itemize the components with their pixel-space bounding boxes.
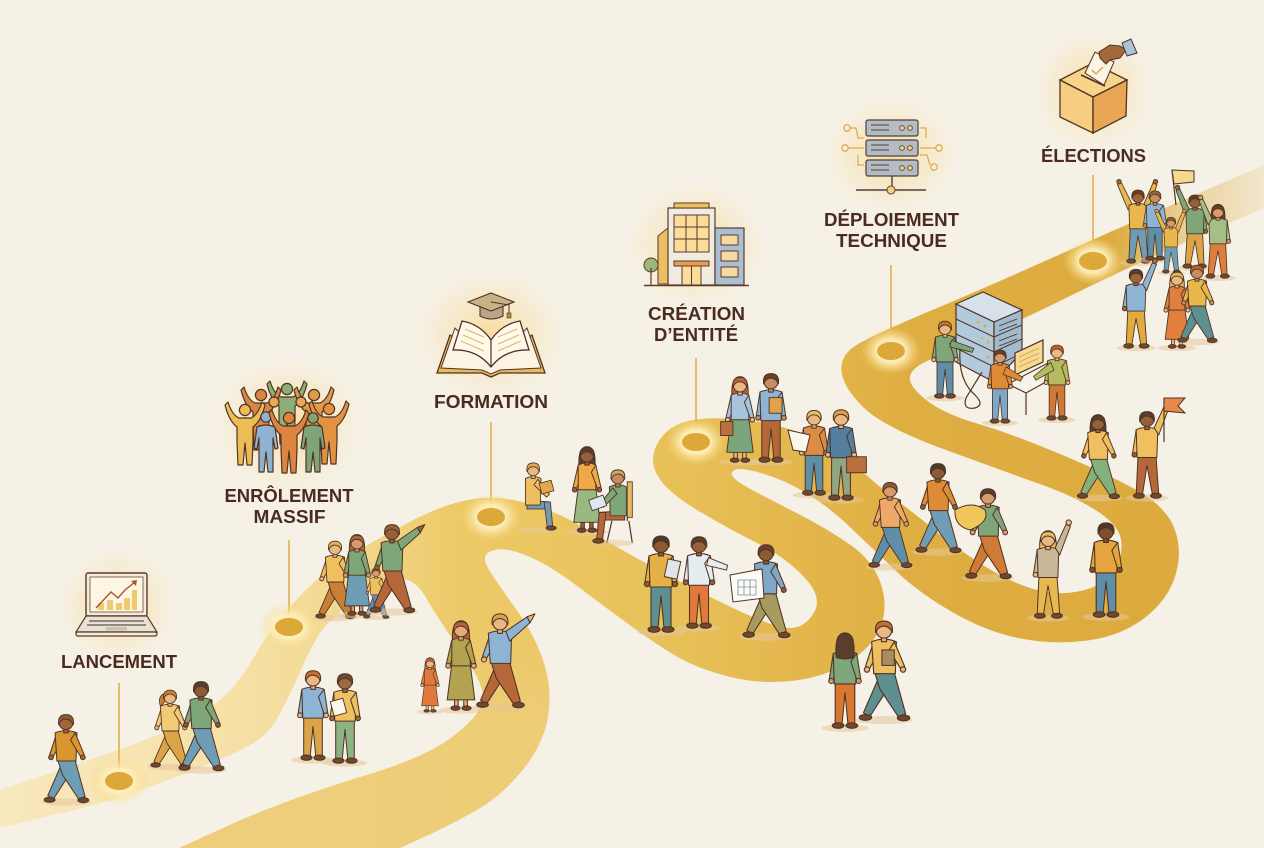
seated man with laptop [589, 470, 634, 546]
woman in orange dress [1158, 271, 1196, 351]
people: plan reviewers [637, 536, 793, 641]
milestone 3: formation [434, 293, 548, 541]
yellow sack [955, 505, 986, 530]
woman with plans [793, 411, 835, 499]
man in blue [291, 671, 335, 764]
person walking, green sweater [175, 682, 227, 774]
person walking, ponytail [148, 690, 192, 770]
marker [259, 603, 319, 651]
people: formation group [518, 447, 634, 546]
icon: server stack [842, 120, 942, 194]
people: greeting pair [1026, 520, 1130, 622]
child cheering [1155, 209, 1186, 275]
label: deploiement technique: TECHNIQUE [836, 231, 947, 251]
person in orange trousers [1198, 195, 1236, 281]
woman walking away [865, 483, 915, 571]
connector pin [490, 422, 492, 517]
icon: office building [644, 203, 749, 286]
man in amber [1082, 523, 1130, 621]
flag [1164, 398, 1185, 442]
label: enrolement massif: MASSIF [254, 507, 326, 527]
milestone 2: enrolement massif [224, 381, 354, 651]
man carrying bag [912, 464, 964, 556]
blueprint sheet [730, 569, 764, 602]
label: enrolement massif: ENRÔLEMENT [224, 485, 354, 506]
people: enrolement family [313, 525, 425, 621]
man raising flag [1125, 400, 1170, 502]
people: celebrating crowd [1116, 170, 1236, 351]
label: formation: FORMATION [434, 392, 548, 412]
people: family on the branch [417, 614, 535, 714]
woman with paper [323, 674, 367, 767]
milestone 4: creation d'entite [644, 203, 749, 466]
woman holding hands [1074, 415, 1122, 501]
glow halos [56, 28, 1155, 663]
woman in green [821, 633, 869, 732]
teacher standing [566, 447, 608, 536]
people: road walkers exchanging a bag [865, 464, 1014, 582]
monitor [1015, 340, 1043, 375]
scene: server rack and technicians [926, 292, 1076, 426]
man pointing [473, 614, 535, 711]
marker [861, 327, 921, 375]
person walking [41, 715, 91, 806]
icon: laptop with growth chart [76, 573, 157, 636]
icon: ballot box [1060, 39, 1137, 133]
person with flag [1175, 185, 1213, 271]
woman with blue skirt [337, 534, 377, 618]
woman in olive dress [439, 621, 483, 714]
man with folder [749, 374, 793, 466]
child [361, 568, 391, 620]
document [788, 430, 810, 452]
people: bottom couple [821, 621, 913, 732]
label: creation d'entite: CRÉATION [648, 303, 745, 324]
milestone 1: lancement [61, 573, 177, 805]
man with tablet [637, 536, 685, 636]
flag [1172, 170, 1194, 205]
man in green [962, 489, 1014, 582]
people: lancement walkers [41, 682, 227, 806]
technician at desk [1034, 345, 1076, 423]
technician in orange [982, 350, 1023, 426]
milestone 5: deploiement technique [824, 120, 959, 375]
man with book [855, 621, 913, 724]
woman with briefcase [719, 377, 761, 466]
woman waving [1026, 520, 1071, 622]
connector pin [695, 358, 697, 442]
milestone 6: elections [1041, 39, 1146, 285]
icon: cheering crowd [225, 381, 349, 473]
man with briefcase [818, 410, 866, 504]
people: pair with flag [1074, 398, 1185, 502]
desk [1008, 362, 1053, 415]
server rack [956, 292, 1022, 382]
cable [960, 350, 982, 408]
person in blue waving [1116, 259, 1157, 351]
icon: open book and graduation cap [437, 293, 545, 377]
people: couple reading a document [291, 671, 367, 767]
label: lancement: LANCEMENT [61, 652, 177, 672]
people: entity founders [719, 374, 866, 504]
connector pin [890, 265, 892, 351]
man in yellow [1175, 265, 1219, 345]
seated woman reading [518, 463, 559, 533]
person in blue [1138, 191, 1172, 263]
marker [1063, 237, 1123, 285]
label: creation d'entite: D’ENTITÉ [654, 324, 738, 345]
woman in yellow [313, 541, 357, 621]
connector pin [288, 540, 290, 627]
connector pin [1092, 175, 1094, 261]
label: elections: ÉLECTIONS [1041, 145, 1146, 166]
marker [89, 757, 149, 805]
technician at rack [926, 321, 974, 401]
person with blueprint [739, 545, 793, 641]
connector pin [118, 683, 120, 781]
child in orange dress [417, 658, 443, 714]
woman in white [676, 537, 728, 632]
marker [461, 493, 521, 541]
label: deploiement technique: DÉPLOIEMENT [824, 209, 959, 230]
marker [666, 418, 726, 466]
person cheering [1117, 179, 1158, 266]
man pointing up [367, 525, 425, 616]
